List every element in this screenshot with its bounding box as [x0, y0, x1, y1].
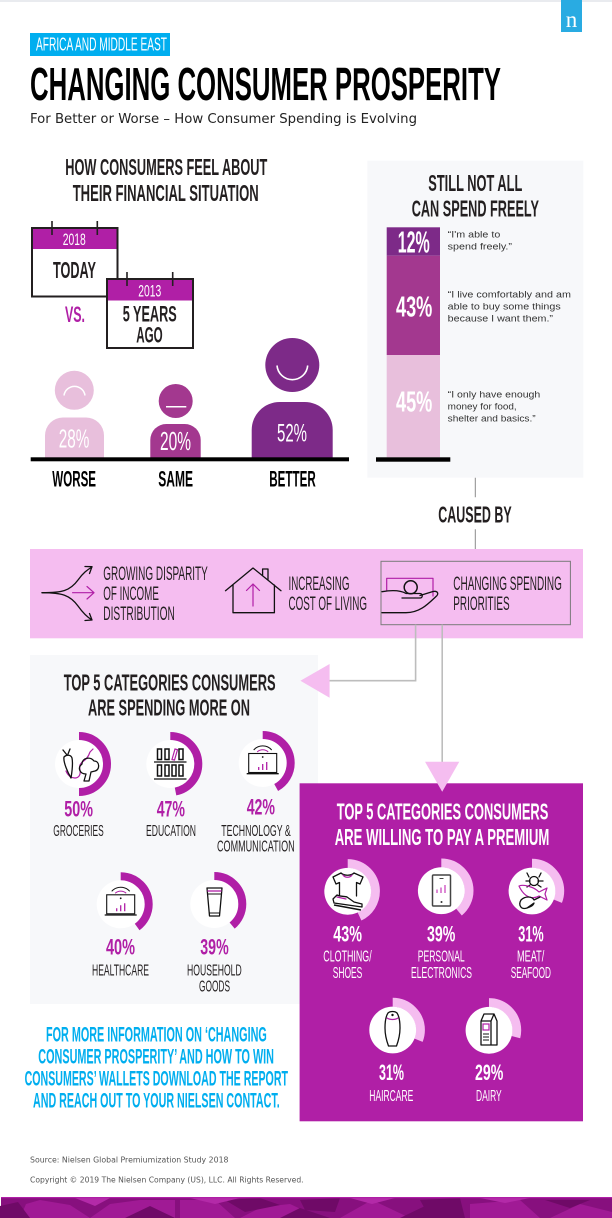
item: meat seafood 31%: SEAFOOD — [511, 965, 551, 982]
quote: only enough: shelter and basics.” — [448, 413, 536, 424]
item: dairy 29%: 29% — [475, 1060, 503, 1085]
icon: crab fish drumstick — [519, 873, 547, 908]
person: worse 28%: WORSE — [52, 467, 96, 492]
item: education 47%: EDUCATION — [146, 823, 196, 840]
text: growing disparity: GROWING DISPARITY — [103, 564, 208, 585]
icon: hand with money — [382, 578, 438, 613]
heading: how consumers feel — [65, 154, 267, 206]
calendar: 2013 five years ago: AGO — [136, 323, 163, 348]
item: clothing shoes 43% — [320, 864, 375, 982]
stacked bar chart — [376, 224, 450, 462]
item: healthcare 40%: 40% — [106, 935, 135, 960]
region badge: AFRICA AND MIDDLE EAST — [36, 34, 167, 54]
item: clothing shoes 43%: 43% — [333, 922, 362, 947]
connector: caused by: CAUSED BY — [438, 502, 512, 528]
person: same 20%: SAME — [158, 467, 193, 492]
panel: willing to pay a premium — [300, 783, 583, 1121]
person: better 52% — [252, 338, 333, 492]
quote: live comfortably: “I live comfortably and am — [448, 290, 571, 301]
calendar: 2018 today: TODAY — [53, 257, 96, 283]
text: increasing cost of living — [288, 574, 367, 615]
icon: laptop with wifi — [247, 746, 279, 774]
source and copyright — [30, 1156, 304, 1184]
quote: live comfortably: able to buy some things — [448, 302, 561, 313]
item: education 47%: 47% — [157, 797, 185, 822]
item: household goods 39%: GOODS — [199, 979, 230, 996]
quote: spend freely — [448, 229, 512, 252]
icon: shirt and shoe — [333, 873, 363, 910]
heading: premium — [335, 798, 549, 850]
quote: spend freely: “I'm able to — [448, 229, 500, 240]
source and copyright: Source: Nielsen Global Premiumization Study 2018 — [30, 1156, 228, 1165]
item: dairy 29%: DAIRY — [476, 1088, 502, 1105]
heading: how consumers feel: THEIR FINANCIAL SITUATION — [73, 180, 259, 206]
stacked bar chart: 43% — [396, 292, 432, 324]
person: worse 28% — [45, 371, 104, 492]
icon: house with arrow — [226, 568, 281, 613]
heading: spending more on — [64, 670, 276, 721]
icon: laptop with wifi — [105, 887, 137, 915]
text: growing disparity — [103, 564, 208, 625]
item: clothing shoes 43%: SHOES — [333, 965, 362, 982]
item: healthcare 40%: HEALTHCARE — [92, 963, 149, 980]
icon: smartphone — [432, 875, 450, 906]
item: groceries 50% — [51, 736, 107, 840]
stacked bar chart: 45% — [396, 387, 432, 419]
item: haircare 31% — [365, 1002, 420, 1105]
text: growing disparity: OF INCOME — [103, 584, 159, 605]
item: meat seafood 31%: 31% — [518, 922, 544, 947]
quote: live comfortably: because I want them.” — [448, 314, 553, 325]
person: better 52%: BETTER — [269, 467, 316, 492]
item: technology 42% — [217, 735, 295, 856]
calendar: 2018 today — [32, 221, 118, 296]
heading: spending more on: ARE SPENDING MORE ON — [88, 695, 250, 721]
calendar: 2013 five years ago: 2013 — [138, 282, 161, 301]
calendar: 2013 five years ago: 5 YEARS — [123, 302, 177, 327]
arrow: to spending more on — [300, 625, 416, 698]
person: same 20% — [150, 384, 201, 492]
icon: diverging arrows — [42, 566, 94, 620]
item: household goods 39%: 39% — [200, 935, 229, 960]
item: household goods 39%: HOUSEHOLD — [187, 963, 242, 980]
calendar: 2018 today: 2018 — [63, 230, 86, 249]
item: personal electronics 39%: ELECTRONICS — [411, 965, 472, 982]
item: meat seafood 31% — [504, 863, 560, 982]
item: clothing shoes 43%: CLOTHING/ — [323, 949, 372, 966]
person: worse 28%: 28% — [59, 424, 89, 454]
text: increasing cost of living: COST OF LIVING — [288, 594, 367, 615]
quote: live comfortably — [448, 290, 571, 325]
item: personal electronics 39% — [411, 863, 472, 982]
item: groceries 50%: GROCERIES — [53, 823, 104, 840]
item: dairy 29% — [461, 1003, 517, 1105]
heading: still not all: STILL NOT ALL — [428, 170, 522, 196]
icon: bookshelf — [154, 749, 186, 779]
quote: only enough: money for food, — [448, 401, 517, 412]
quote: only enough — [448, 389, 540, 424]
panel: spending more on — [30, 655, 318, 1004]
heading: spending more on: TOP 5 CATEGORIES CONSUMERS — [64, 670, 276, 696]
item: education 47% — [142, 736, 198, 840]
source and copyright: Copyright © 2019 The Nielsen Company (US), LLC. All Rights Reserved. — [30, 1175, 304, 1184]
label: vs: VS. — [65, 302, 85, 327]
item: personal electronics 39%: PERSONAL — [418, 949, 465, 966]
quote: spend freely: spend freely.” — [448, 241, 512, 252]
item: haircare 31%: HAIRCARE — [369, 1088, 413, 1105]
item: haircare 31%: 31% — [379, 1060, 404, 1085]
item: technology 42%: TECHNOLOGY & — [221, 823, 291, 840]
heading: still not all — [412, 170, 539, 222]
text: changing spending priorities: PRIORITIES — [453, 594, 510, 615]
item: technology 42%: COMMUNICATION — [217, 839, 295, 856]
person: better 52%: 52% — [277, 420, 307, 448]
subtitle: For Better or Worse – How Consumer Spending is Evolving — [30, 112, 417, 127]
highlighted box: changing spending priorities — [381, 561, 570, 625]
item: groceries 50%: 50% — [64, 797, 93, 822]
region badge — [30, 33, 170, 56]
logo: Nielsen n — [561, 0, 582, 32]
heading: how consumers feel: HOW CONSUMERS FEEL ABOUT — [65, 154, 267, 180]
panel: how consumers feel — [31, 154, 349, 492]
logo: Nielsen n: n — [566, 7, 578, 32]
baseline — [31, 457, 349, 461]
text: increasing cost of living: INCREASING — [288, 574, 350, 595]
quote: only enough: “I only have enough — [448, 389, 540, 400]
item: personal electronics 39%: 39% — [427, 922, 455, 947]
item: meat seafood 31%: MEAT/ — [517, 949, 545, 966]
connector: caused by — [438, 478, 512, 549]
item: healthcare 40% — [92, 876, 149, 980]
call to action — [25, 1024, 288, 1112]
item: household goods 39% — [186, 876, 242, 996]
item: technology 42%: 42% — [247, 794, 275, 819]
panel: causes band — [30, 549, 583, 638]
footer band: magenta cubes — [0, 1197, 612, 1218]
call to action: CONSUMERS’ WALLETS DOWNLOAD THE REPORT — [25, 1067, 288, 1090]
person: same 20%: 20% — [160, 426, 191, 456]
icon: vegetables — [63, 749, 99, 781]
stacked bar chart: 12% — [398, 224, 430, 259]
arrow: to willing to pay premium — [425, 625, 459, 792]
panel: still not all can spend freely — [367, 161, 583, 478]
icon: tube — [207, 888, 222, 916]
call to action: CONSUMER PROSPERITY’ AND HOW TO WIN — [38, 1046, 274, 1069]
icon: bottle — [385, 1012, 400, 1046]
icon: milk carton — [481, 1014, 497, 1045]
text: changing spending priorities — [453, 574, 562, 615]
text: growing disparity: DISTRIBUTION — [103, 604, 175, 625]
calendar: 2013 five years ago — [107, 272, 193, 348]
call to action: FOR MORE INFORMATION ON ‘CHANGING — [46, 1024, 267, 1047]
call to action: AND REACH OUT TO YOUR NIELSEN CONTACT. — [33, 1089, 280, 1112]
